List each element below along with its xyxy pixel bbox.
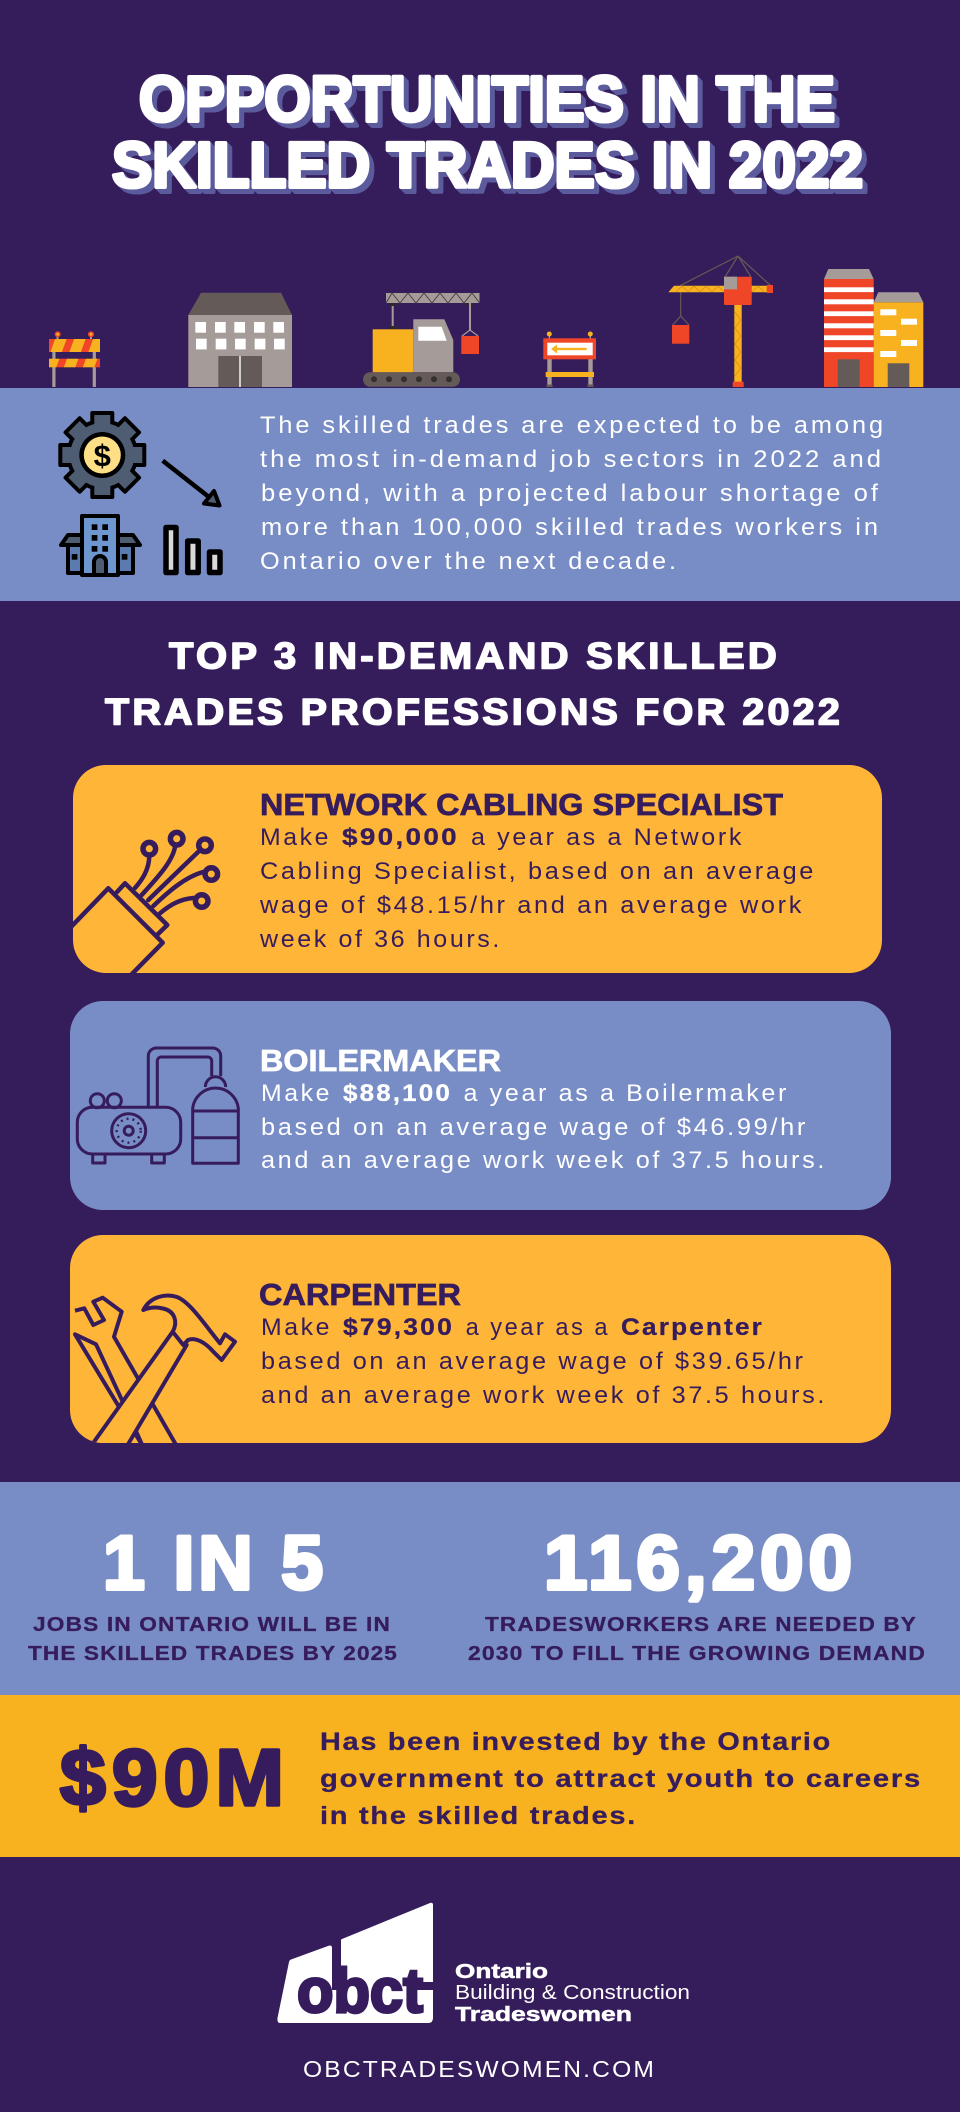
intro text: the most in-demand job sectors in 2022 and bbox=[260, 446, 884, 473]
card body: wage of $48.15/hr and an average work bbox=[259, 892, 804, 919]
stat: 116,200: 116,200 bbox=[544, 1521, 857, 1606]
card body: week of 36 hours. bbox=[259, 926, 502, 953]
icon: gear with dollar sign: $ bbox=[94, 438, 111, 473]
logo wordmark: Tradeswomen bbox=[455, 2004, 632, 2026]
icon: downward arrow bbox=[163, 461, 220, 506]
logo: OBCT bbox=[277, 1903, 690, 2082]
card body: Make bbox=[261, 1080, 332, 1107]
logo wordmark: Ontario bbox=[455, 1961, 548, 1983]
panel: boilermaker bbox=[70, 1001, 891, 1210]
website: OBCTRADESWOMEN.COM bbox=[303, 2056, 656, 2082]
stat: 1 in 5: THE SKILLED TRADES BY 2025 bbox=[28, 1643, 398, 1665]
panel: labour shortage intro bbox=[0, 388, 960, 601]
intro text: Ontario over the next decade. bbox=[260, 548, 679, 575]
card body: Make bbox=[261, 1314, 332, 1341]
panel: investment bbox=[0, 1695, 960, 1857]
icon: red and yellow buildings bbox=[824, 269, 923, 387]
card body: a year as a bbox=[466, 1314, 610, 1341]
investment text: in the skilled trades. bbox=[320, 1802, 637, 1830]
construction skyline illustration bbox=[49, 256, 923, 387]
icon: declining bars bbox=[166, 528, 220, 572]
card body: and an average work week of 37.5 hours. bbox=[261, 1147, 827, 1174]
stat: 116,200: TRADESWORKERS ARE NEEDED BY bbox=[485, 1614, 917, 1636]
icon: tower crane bbox=[668, 256, 773, 387]
heading: top 3 professions bbox=[105, 636, 843, 732]
card body bbox=[261, 1314, 827, 1409]
card body: Make bbox=[260, 824, 331, 851]
logo mark bbox=[277, 1903, 433, 2026]
icon: gear with dollar sign bbox=[58, 411, 146, 499]
logo wordmark bbox=[455, 1961, 690, 2026]
stat: 1 in 5: JOBS IN ONTARIO WILL BE IN bbox=[33, 1614, 391, 1636]
stat: 1 in 5: 1 IN 5 bbox=[103, 1521, 327, 1606]
icon: arrow road sign bbox=[543, 332, 596, 387]
title bbox=[112, 63, 863, 201]
card body bbox=[261, 1080, 827, 1174]
card title: BOILERMAKER bbox=[260, 1044, 501, 1078]
card body: based on an average wage of $46.99/hr bbox=[261, 1114, 808, 1141]
intro text: The skilled trades are expected to be among bbox=[260, 412, 886, 439]
logo mark: obct bbox=[297, 1957, 423, 2026]
icon: fibre optic cable bbox=[70, 832, 218, 978]
card body: Carpenter bbox=[621, 1314, 764, 1341]
stat: 1 in 5 bbox=[28, 1521, 398, 1665]
card body: Cabling Specialist, based on an average bbox=[260, 858, 816, 885]
heading: top 3 professions: TRADES PROFESSIONS FOR 2022 bbox=[105, 692, 843, 732]
investment text: government to attract youth to careers bbox=[320, 1765, 922, 1793]
logo wordmark: Building & Construction bbox=[455, 1982, 690, 2004]
title: SKILLED TRADES IN 2022 bbox=[112, 129, 863, 201]
card title: NETWORK CABLING SPECIALIST bbox=[260, 788, 783, 822]
card body: and an average work week of 37.5 hours. bbox=[261, 1382, 827, 1409]
card body: a year as a Network bbox=[471, 824, 744, 851]
card body: based on an average wage of $39.65/hr bbox=[261, 1348, 806, 1375]
card body bbox=[259, 824, 816, 953]
icon: wrench and hammer bbox=[75, 1296, 235, 1446]
investment text: Has been invested by the Ontario bbox=[320, 1728, 832, 1756]
panel: network cabling specialist bbox=[70, 765, 882, 978]
investment text bbox=[320, 1728, 922, 1830]
stat: 116,200 bbox=[468, 1521, 926, 1665]
intro text: more than 100,000 skilled trades workers in bbox=[261, 514, 881, 541]
panel: carpenter bbox=[70, 1235, 891, 1446]
icon: barricade bbox=[49, 331, 100, 387]
icon: grey building bbox=[188, 293, 292, 387]
icon: crane truck bbox=[363, 293, 480, 387]
intro text: beyond, with a projected labour shortage of bbox=[261, 480, 881, 507]
card body: $90,000 bbox=[342, 824, 459, 851]
card title: CARPENTER bbox=[259, 1278, 461, 1312]
panel: statistics bbox=[0, 1482, 960, 1695]
stat: $90M: $90M bbox=[60, 1733, 290, 1822]
heading: top 3 professions: TOP 3 IN-DEMAND SKILLED bbox=[169, 636, 780, 676]
intro text bbox=[260, 412, 886, 575]
stat: 116,200: 2030 TO FILL THE GROWING DEMAND bbox=[468, 1643, 926, 1665]
title: OPPORTUNITIES IN THE bbox=[139, 63, 835, 135]
card body: a year as a Boilermaker bbox=[464, 1080, 789, 1107]
icon: boiler and tank bbox=[77, 1048, 238, 1163]
icon: office building bbox=[61, 516, 140, 575]
card body: $79,300 bbox=[343, 1314, 454, 1341]
card body: $88,100 bbox=[343, 1080, 452, 1107]
